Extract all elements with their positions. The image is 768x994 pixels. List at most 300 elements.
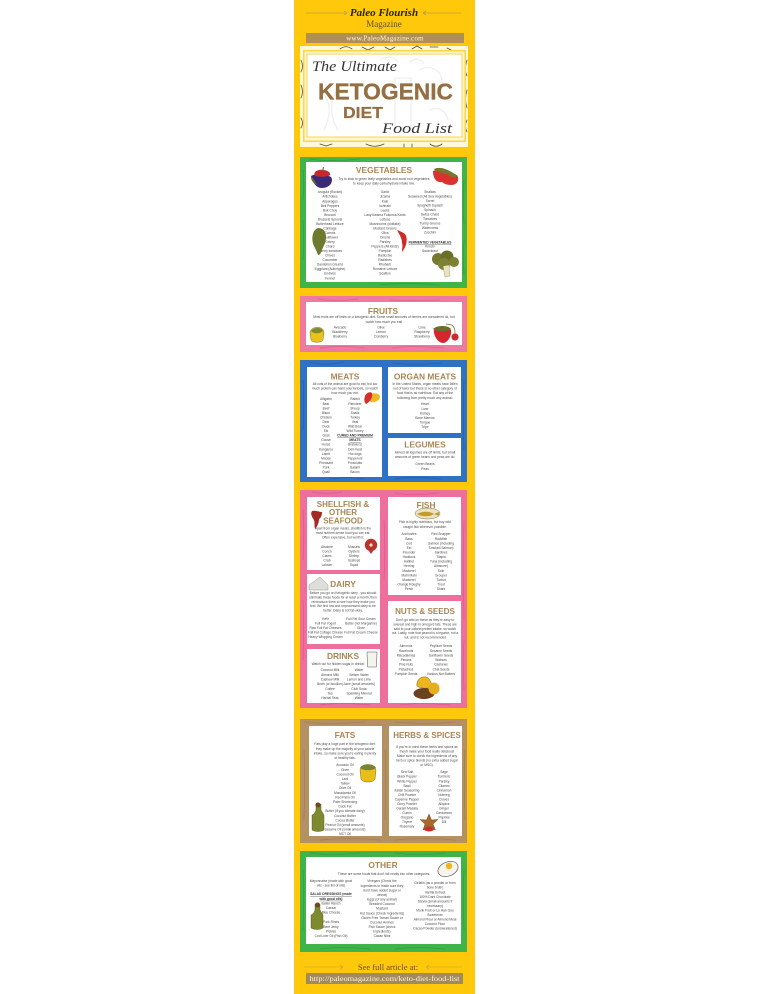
vegetable list column 1: Fennel	[325, 276, 335, 280]
meat list column 1: Goose	[321, 438, 331, 442]
panel: fats and herbs	[300, 719, 467, 843]
heading: legumes: LEGUMES	[404, 440, 446, 450]
fish list column 2: Albacore)	[434, 564, 448, 568]
fat list: Avocado Oil	[336, 763, 354, 767]
meat list column 1: Quail	[322, 470, 330, 474]
fish list column 2: Tuna (including	[430, 560, 452, 564]
other list column 2: ingredients to make sure they	[361, 884, 404, 888]
vegetable list column 2: Mushrooms (shiitake)	[369, 222, 401, 226]
vegetable list column 1: Butterhead Lettuce	[316, 222, 344, 226]
vegetable list column 3: Swiss Chard	[421, 213, 439, 217]
herb list column 2: Paprika	[438, 816, 450, 820]
card: fats	[309, 726, 382, 836]
heading: dairy: DAIRY	[330, 579, 356, 589]
title: KETOGENIC: KETOGENIC	[318, 78, 453, 104]
other list column 2: Mustard	[376, 907, 388, 911]
vegetable list column 2: Kale	[382, 199, 388, 203]
fat list: Butter (if you tolerate dairy)	[325, 809, 365, 813]
vegetable list column 1: Celery	[325, 240, 335, 244]
card: legumes	[388, 438, 461, 476]
subtitle: Food List: Food List	[381, 121, 453, 137]
other list column 3: necessary)	[427, 904, 443, 908]
other list column 3: Gelatin (as a powder or from	[414, 881, 456, 885]
vegetable list column 3: Spaghetti Squash	[417, 204, 443, 208]
fish list column 1: Haddock	[403, 555, 416, 559]
herb list column 2: Ginger	[439, 806, 450, 810]
organ meat list: Heart	[421, 402, 429, 406]
nut list column 2: Chia Seeds	[433, 667, 450, 671]
salad dressings list: with good oils)	[319, 897, 342, 901]
title: DIET: DIET	[343, 105, 384, 122]
meat list column 2: MEATS	[349, 438, 361, 442]
heading: shellfish and other seafood: SEAFOOD	[323, 516, 363, 525]
icon: oil bottle	[311, 902, 323, 930]
dairy list column 2: Ghee	[357, 626, 365, 630]
herb list column 2: Cilantro	[438, 784, 450, 788]
other list column 3: Sweetener	[427, 913, 444, 917]
fish list column 1: Anchovies	[402, 532, 417, 536]
heading: herbs and spices: HERBS & SPICES	[393, 731, 461, 740]
organ meat list: Bone Marrow	[415, 416, 435, 420]
intro text: feel. We find low and unprocessed dairy to be	[310, 604, 376, 608]
intro text: caught fish wherever possible.	[403, 525, 447, 529]
hero title card	[300, 46, 468, 147]
fish list column 2: Grouper	[435, 573, 448, 577]
other list column 3: Monk Fruit or Lo Han Guo	[416, 908, 454, 912]
fish list column 2: Shark	[437, 587, 446, 591]
intro text: watch how much you eat!	[366, 320, 402, 324]
meat list column 2: Turkey	[350, 415, 360, 419]
heading: vegetables: VEGETABLES	[356, 165, 412, 175]
fish list column 1: Eel	[407, 546, 412, 550]
seafood list column 2: Scallops	[348, 559, 361, 563]
meat list column 1: Duck	[322, 424, 330, 428]
fish list column 1: Flounder	[403, 550, 416, 554]
herb list column 2: Dill	[442, 820, 447, 824]
card: fish	[388, 497, 461, 595]
vegetable list column 1: Eggplant (Aubergine)	[315, 267, 345, 271]
fruit list column 1: Blackberry	[332, 330, 348, 334]
intro text: Apart from organ meats, shellfish is the	[315, 526, 371, 530]
fish list column 1: Halibut	[404, 560, 414, 564]
vegetable list column 3: Seaweed (All Sea Vegetables)	[408, 195, 452, 199]
heading: meats: MEATS	[331, 372, 360, 382]
meat list column 2: CURED AND PREMIUM	[337, 434, 373, 438]
intro text: Almost all legumes are off limits, but small	[395, 450, 455, 454]
nut list column 1: Macadamias	[397, 653, 416, 657]
other list column 2: Hot Sauce (Check Ingredients)	[360, 911, 404, 915]
meat list column 2: Prosciutto	[348, 461, 362, 465]
fermented vegetables list: Sauerkraut	[422, 249, 438, 253]
herb list column 1: Basil	[403, 784, 411, 788]
dairy list column 2: Butter (not Margarine)	[345, 622, 377, 626]
other list column 2: Cacao Nibs	[374, 934, 391, 938]
fish list column 2: Sole	[438, 569, 444, 573]
vegetable list column 2: Lettuce	[380, 217, 391, 221]
footer: see full article	[304, 962, 462, 972]
drink list column 2: Sparkling Mineral	[346, 691, 372, 695]
meat list column 2: Wild Turkey	[347, 429, 364, 433]
intro text: Make sure to check the ingredients of any	[397, 754, 457, 758]
meat list column 1: Bear	[323, 402, 330, 406]
fruit list column 3: Lime	[418, 326, 426, 330]
herb list column 1: Chili Powder	[398, 793, 417, 797]
nut list column 1: Pistachios	[399, 667, 414, 671]
herb list column 2: Cinnamon	[437, 788, 452, 792]
heading: fruits: FRUITS	[368, 306, 399, 316]
intro text: Most fruits are off limits on a ketogenic diet. Some small amounts of berries are considered ok, but	[313, 315, 455, 319]
herb list column 1: Rosemary	[400, 825, 415, 829]
vegetable list column 1: Brussels Sprouts	[318, 217, 343, 221]
other list column 1: Mayonnaise (made with good	[310, 879, 352, 883]
fish list column 1: Mackerel	[402, 578, 416, 582]
intro text: to keep your daily carbohydrate intake low.	[353, 182, 415, 186]
drink list column 1: Tea	[327, 691, 333, 695]
intro text: amounts of green beans and peas are ok:	[395, 455, 455, 459]
fish list column 2: Salmon (including	[428, 541, 454, 545]
organ meat list: Kidney	[420, 411, 430, 415]
fruit list column 2: Cranberry	[374, 335, 389, 339]
meat list column 2: Sheep	[350, 406, 360, 410]
icon: tomatoes	[433, 168, 458, 185]
vegetable list column 1: Cauliflower	[322, 236, 339, 240]
card: shellfish and other seafood	[307, 497, 380, 570]
intro text: Watch out for hidden sugar in drinks!	[312, 662, 365, 666]
vegetable list column 1: Endives	[324, 272, 336, 276]
icon: lemons basket	[310, 327, 324, 342]
fat list: Red Palm Oil	[335, 795, 355, 799]
intro text: how much you eat.	[331, 391, 359, 395]
meat list column 2: Hot dogs	[348, 452, 362, 456]
footer: article url banner: http://paleomagazine.com/keto-diet-food-list	[310, 974, 461, 983]
icon: lobster	[311, 511, 322, 529]
seafood list column 2: Shrimp	[349, 554, 359, 558]
salad dressings list: Bleu Cheese	[322, 910, 340, 914]
other list column 2: Vinegars (Check the	[367, 879, 397, 883]
icon: eggplant	[311, 167, 332, 188]
intro text: most nutrient dense food you can eat.	[316, 531, 370, 535]
intro text: overeat and high in omega 6 fats. These are	[393, 622, 457, 626]
card: meats	[307, 367, 382, 477]
vegetable list column 2: Leeks	[381, 208, 390, 212]
nut list column 2: Cashews	[434, 663, 448, 667]
herb list column 2: Sage	[440, 770, 448, 774]
icon: cheese wedge	[309, 577, 328, 590]
other list column 3: Almond Flour or Almond Meal	[414, 917, 457, 921]
heading: shellfish and other seafood: OTHER	[329, 508, 357, 517]
other list column 2: don't have added sugar or	[363, 888, 402, 892]
herb list column 2: Allspice	[438, 802, 450, 806]
herb list column 1: Sea Salt	[401, 770, 413, 774]
salad dressings list: SALAD DRESSINGS (made	[310, 892, 352, 896]
fish list column 1: Mackerel	[402, 569, 416, 573]
panel: seafood, dairy, nuts and drinks	[300, 490, 467, 708]
card: herbs and spices	[389, 726, 462, 836]
intro text: These are some foods that don't fall neatly into other categories.	[338, 872, 430, 876]
vegetable list column 2: Radishes	[378, 258, 392, 262]
intro text: reintroduce them to see how they make you	[311, 600, 375, 604]
other list column 3: 100% Dark Chocolate	[419, 895, 451, 899]
herb list column 1: Cayenne Pepper	[395, 797, 420, 801]
intro text: they'll make your food really delicious!	[400, 750, 454, 754]
heading: shellfish and other seafood	[317, 500, 369, 525]
drink list column 1: Broth (or bouillon)	[317, 682, 343, 686]
other list column 2: ingredients)	[374, 930, 390, 934]
fish list column 1: Herring	[404, 564, 415, 568]
vegetable list column 2: Lady Ikeama Fukunoa Kinds	[364, 213, 406, 217]
vegetable list column 3: Shallots	[424, 190, 436, 194]
vegetable list column 2: Scallion	[379, 272, 391, 276]
dairy list column 1: Raw Full Fat Cheeses	[310, 626, 342, 630]
intro text: Don't go wild on these as they're easy to	[396, 618, 454, 622]
vegetable list column 2: Radicchio	[378, 254, 392, 258]
vegetable list column 3: Zucchini	[424, 230, 436, 234]
fish list column 2: Sardines	[435, 550, 448, 554]
intro text: All cuts of the animal are good to eat, but too	[313, 382, 377, 386]
fruit list column 3: Strawberry	[414, 335, 430, 339]
vegetable list column 1: Arugula (Rocket)	[318, 190, 342, 194]
seafood list column 1: Abalone	[321, 545, 333, 549]
panel: vegetables	[300, 157, 467, 984]
heading: shellfish and other seafood: SHELLFISH &	[317, 500, 369, 509]
vegetable list column 2: Rhubarb	[379, 263, 391, 267]
heading: fish: FISH	[416, 500, 436, 510]
icon: star anise	[420, 814, 438, 832]
card: dairy	[307, 574, 380, 644]
heading: drinks: DRINKS	[327, 651, 359, 661]
fat list: Duck Fat	[338, 805, 352, 809]
intro text: or MSG).	[420, 763, 434, 767]
herb list column 2: Cardamom	[436, 811, 452, 815]
drink list column 2: Seltzer Water	[349, 673, 370, 677]
drink list column 1: Almond Milk	[321, 673, 339, 677]
nut list column 2: Walnuts	[435, 658, 447, 662]
vegetable list column 3: Watercress	[422, 226, 439, 230]
vegetable list column 2: Parsley	[380, 240, 391, 244]
dairy list column 2: Full Fat Cream Cheese	[344, 631, 378, 635]
intro text: food that is as nutritious. Eat any of the	[397, 391, 453, 395]
vegetable list column 2: Pumpkin	[379, 249, 392, 253]
vegetable list column 2: Peppers (All kinds)	[371, 245, 399, 249]
intro text: they make up the majority of your calorie	[316, 747, 374, 751]
vegetable list column 1: Carrots	[325, 231, 336, 235]
fat list: Coconut Butter	[334, 814, 357, 818]
intro text: herb or spice blends (no extra added sugar	[396, 758, 459, 762]
icon: oil bottle	[312, 802, 324, 832]
fat list: MCT Oil	[339, 832, 351, 836]
meat list column 1: Beef	[323, 406, 329, 410]
vegetable list column 2: kohlrabi	[379, 204, 391, 208]
header: Paleo Flourish Magazine: Paleo Flourish	[350, 7, 418, 19]
meat list column 1: Chicken	[320, 415, 332, 419]
vegetable list column 3: Turnip Greens	[420, 221, 441, 225]
herb list column 1: Black Pepper	[397, 775, 418, 779]
other list column 3: Stevia (small amounts if	[418, 899, 452, 903]
header: Paleo Flourish Magazine: Magazine	[366, 19, 402, 29]
fruit list column 3: Raspberry	[414, 330, 430, 334]
fat list: Palm Shortening	[333, 800, 357, 804]
fish list column 1: Cod	[406, 541, 412, 545]
seafood list column 1: Conch	[322, 550, 332, 554]
vegetable list column 1: Cabbage	[323, 226, 337, 230]
heading: organ meats: ORGAN MEATS	[394, 372, 457, 382]
intro text: eliminate these foods for at least a month, then	[309, 595, 377, 599]
vegetable list column 1: Bell Peppers	[321, 204, 340, 208]
other list column 2: Eggs (of any animal)	[367, 898, 397, 902]
drink list column 2: Water	[355, 668, 364, 672]
icon: lettuce	[312, 228, 326, 255]
meat list column 1: Horse	[322, 443, 331, 447]
meat list column 1: Deer	[322, 420, 330, 424]
dairy list column 2: Full Fat Sour Cream	[346, 617, 376, 621]
other list column 3: Vanilla Extract	[425, 890, 445, 894]
intro text: nut, and is not recommended	[404, 636, 446, 640]
fish list column 1: Bass	[405, 537, 413, 541]
icon: salmon steak	[365, 539, 377, 554]
nut list column 1: Pumpkin Seeds	[395, 672, 418, 676]
icon: chili pepper	[397, 230, 407, 252]
other list column 2: Coconut Aminos	[370, 920, 394, 924]
meat list column 1: Pork	[323, 465, 330, 469]
fish list column 1: Orange Roughy	[398, 582, 421, 586]
nut list column 2: Psyllium Seeds	[430, 644, 452, 648]
dairy list column 1: Full Fat Yogurt	[315, 622, 336, 626]
icon: meat cut	[364, 392, 380, 404]
card: nuts and seeds	[388, 601, 461, 703]
meat list column 1: Kangaroo	[319, 447, 333, 451]
icon: butter pot	[360, 764, 376, 782]
icon: fish on plate	[415, 508, 440, 519]
herb list column 2: Turmeric	[438, 775, 451, 779]
other list column 3: Cacao Powder (unsweetened)	[413, 926, 457, 930]
panel: other	[300, 851, 467, 952]
meat list column 2: Pepperoni	[348, 456, 363, 460]
intro text: Often expensive, but worth it.	[322, 536, 364, 540]
drink list column 2: Club Soda	[351, 687, 367, 691]
other list column 3: Coconut Flour	[425, 922, 446, 926]
meat list column 2: Salami	[350, 465, 360, 469]
fish list column 1: Mahi Mahi	[402, 573, 417, 577]
vegetable list column 1: Cucumber	[322, 258, 338, 262]
drink list column 1: Coffee	[325, 687, 335, 691]
fat list: Lard	[342, 777, 348, 781]
dairy list column 1: Full Fat Cottage Cheese	[308, 631, 343, 635]
intro text: Try to stick to green leafy vegetables and avoid root vegetables	[339, 177, 430, 181]
dairy list column 1: Heavy Whipping Cream	[308, 635, 343, 639]
fermented vegetables list: FERMENTED VEGETABLES	[409, 240, 452, 244]
meat list column 1: Alligator	[320, 397, 333, 401]
other list column 1: oils - see list of oils)	[317, 884, 345, 888]
vegetable list column 1: Chives	[325, 254, 335, 258]
seafood list column 1: Lobster	[322, 563, 333, 567]
organ meat list: Tongue	[420, 420, 431, 424]
seafood list column 1: Crab	[323, 559, 331, 563]
heading: nuts and seeds: NUTS & SEEDS	[395, 607, 456, 616]
vegetable list column 2: Romaine Lettuce	[373, 267, 397, 271]
website banner: www.PaleoMagazine.com	[346, 34, 424, 42]
herb list column 1: Thyme	[402, 820, 412, 824]
other list column 3: bone broth)	[427, 886, 443, 890]
drink list column 2: Water	[355, 696, 364, 700]
intro text: of healthy fats.	[334, 756, 356, 760]
icon: broccoli	[432, 250, 459, 277]
meat list column 1: Moose	[321, 456, 331, 460]
icon: strawberry and cherries	[433, 324, 459, 343]
fat list: Cocoa Butter	[336, 818, 355, 822]
fat list: Olive Oil	[339, 786, 351, 790]
fish list column 2: Rockfish	[435, 537, 447, 541]
other list column 2: Breaded Coconut	[369, 902, 395, 906]
seafood list column 2: Oysters	[348, 550, 360, 554]
card: organ meats	[388, 367, 461, 433]
legume list: Green Beans	[415, 462, 435, 466]
fermented vegetables list: Kimchi	[425, 244, 435, 248]
herb list column 1: Curry Powder	[397, 802, 418, 806]
intro text: following from pretty much any animal:	[397, 396, 453, 400]
vegetable list column 1: Dandelion Greens	[317, 263, 343, 267]
meat list column 2: Deli meat	[348, 447, 362, 451]
vegetable list column 2: Garlic	[381, 190, 390, 194]
vegetable list column 2: Onions	[380, 236, 391, 240]
card: drinks	[307, 649, 380, 703]
drink list column 2: Juice (small amounts)	[343, 682, 375, 686]
vegetable list column 2: Okra	[381, 231, 389, 235]
fat list: Coconut Oil	[337, 772, 354, 776]
other list column 2: Gluten Free Tamari Sauce or	[361, 916, 404, 920]
intro text: out of favor but these is no other category of	[393, 387, 457, 391]
fruit list column 1: Avocado	[334, 326, 346, 330]
vegetable list column 3: Sorrel	[426, 199, 435, 203]
snacks list: Beef Jerky	[323, 925, 339, 929]
nut list column 2: Various Nut Butters	[427, 672, 455, 676]
vegetable list column 1: Broccoli	[324, 213, 336, 217]
meat list column 2: Veal	[352, 420, 358, 424]
fat list: Macadamia Oil	[334, 791, 356, 795]
intro text: Fats play a huge part in the ketogenic diet:	[314, 742, 376, 746]
seafood list column 1: Clams	[322, 554, 332, 558]
intro text: better. Dairy is not fat-okay.	[323, 609, 363, 613]
vegetable list column 2: Jicama	[380, 195, 390, 199]
fish list column 2: Red Snapper	[431, 532, 451, 536]
fish list column 2: Smoked Salmon)	[429, 546, 453, 550]
vegetable list column 3: Spinach	[424, 208, 436, 212]
intro text: much protein can harm your ketosis, so watch	[312, 387, 378, 391]
nut list column 1: Pecans	[401, 658, 412, 662]
snacks list: Pork Rinds	[323, 920, 339, 924]
salad dressings list: Italian Ranch	[322, 901, 341, 905]
intro text: In the United States, organ meats have fallen	[392, 382, 458, 386]
fruit list column 2: Olive	[377, 326, 385, 330]
meat list column 2: Bratwurst	[348, 443, 362, 447]
herb list column 1: Italian Seasoning	[395, 788, 420, 792]
meat list column 2: Wild Boar	[348, 424, 363, 428]
drink list column 1: Coconut Milk	[321, 668, 340, 672]
salad dressings list: Caesar	[326, 906, 337, 910]
dairy list column 1: Kefir	[322, 617, 330, 621]
intro text: said to your calorie/protein intake, so watch	[394, 627, 456, 631]
meat list column 1: Elk	[324, 429, 329, 433]
snacks list: Cod Liver Oil (Fish Oil)	[315, 934, 347, 938]
website banner	[306, 33, 464, 43]
intro text: Fish is highly nutritious, but buy wild	[399, 520, 451, 524]
fruit list column 2: Lemon	[376, 330, 386, 334]
vegetable list column 2: Mustard Greens	[373, 226, 397, 230]
vegetable list column 1: Asparagus	[322, 199, 338, 203]
intro text: intake, so make sure you're eating in plenty	[314, 751, 377, 755]
organ meat list: Liver	[421, 407, 429, 411]
other list column 2: Fish Sauce (check	[369, 925, 396, 929]
meat list column 2: Snails	[351, 411, 360, 415]
